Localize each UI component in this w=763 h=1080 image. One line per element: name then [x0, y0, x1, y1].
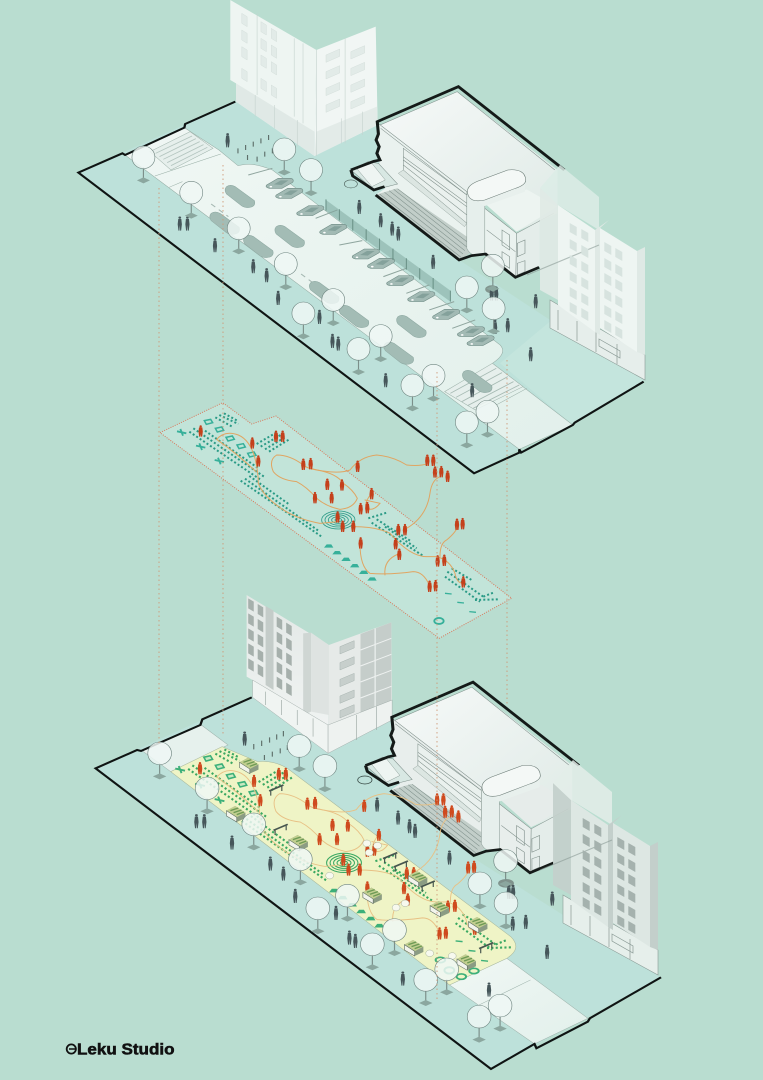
vertical dashed connector lines	[159, 165, 507, 1000]
studio logo: Leku Studio	[77, 1042, 174, 1058]
plate outline	[78, 102, 644, 473]
sidewalk plate	[96, 697, 661, 1069]
lower crosswalk	[445, 363, 527, 410]
back-left residential block	[230, 0, 378, 156]
bollards	[254, 731, 287, 760]
parking bay lines	[248, 168, 475, 328]
pedestrians	[178, 133, 510, 397]
civic building reused in redesigned street	[365, 682, 579, 873]
play marks, routes and figures	[177, 413, 498, 624]
roadway	[125, 128, 573, 449]
middle layer: floating activity plan	[160, 403, 512, 638]
dotted plan outline	[160, 403, 512, 638]
street trees	[148, 735, 518, 1043]
pale ground glow under right buildings	[500, 320, 644, 425]
green rings at street end	[436, 957, 479, 979]
play marks, routes and figures on redesigned street	[175, 749, 511, 974]
roadway ends	[141, 724, 588, 1044]
right residential block in redesigned street	[540, 760, 658, 975]
right residential block, top layer	[527, 165, 645, 380]
pedestrians	[194, 731, 554, 997]
street trees	[132, 138, 505, 448]
street manhole	[358, 776, 372, 784]
centre line dashes	[211, 204, 320, 288]
upper crosswalk	[150, 132, 221, 187]
cafe table	[485, 285, 498, 293]
cafe table	[498, 879, 514, 888]
back-left residential block	[247, 595, 392, 753]
pedestrians in front of top right block	[529, 294, 538, 361]
top layer: existing street with parking	[78, 0, 644, 473]
bollards	[238, 135, 272, 162]
planters	[226, 758, 487, 970]
sidewalk plate	[78, 102, 644, 473]
green fence beside parking	[326, 199, 450, 302]
bottom layer: redesigned street	[96, 595, 661, 1069]
civic building with heavy outline	[351, 87, 564, 277]
plate outline	[96, 697, 661, 1069]
benches	[269, 785, 493, 953]
parked and moving cars	[210, 178, 494, 393]
furniture, people and trees on redesigned street	[148, 731, 554, 1043]
yellow-green play street surface	[171, 747, 516, 985]
street manhole	[344, 180, 357, 188]
white pebble seats	[326, 840, 456, 959]
